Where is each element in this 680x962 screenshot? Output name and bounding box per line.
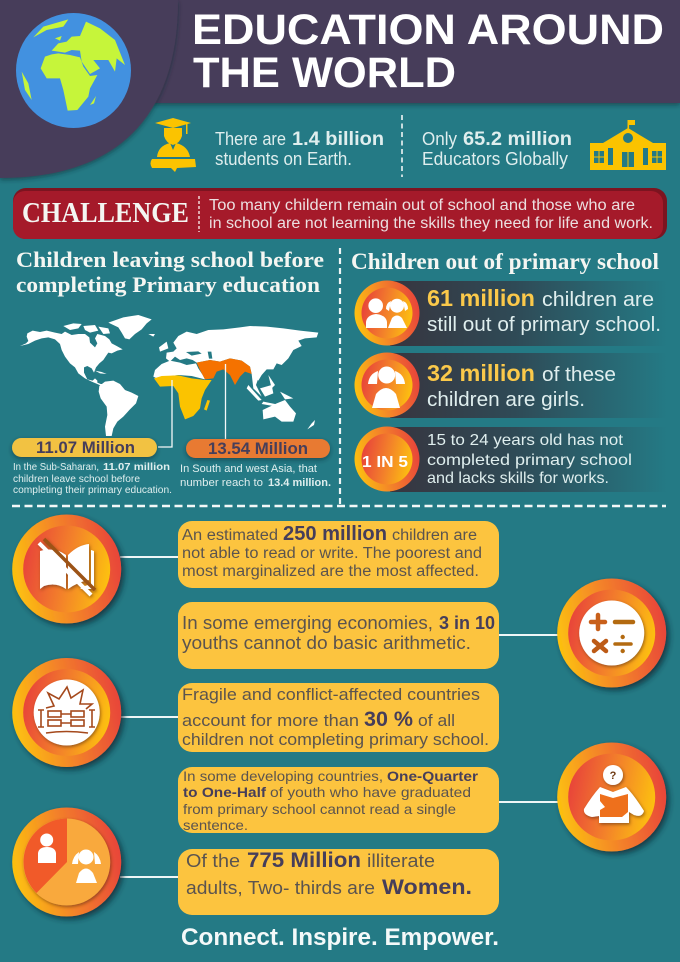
- row: 32 million: 32 million: [427, 360, 535, 386]
- header band: [0, 0, 680, 103]
- box: 775 million: illiterate: [367, 851, 435, 871]
- box: one-quarter to one-half: In some developing countries,: [183, 768, 383, 784]
- row: 61 million: children are: [542, 289, 654, 311]
- icon: conflict fists: [12, 658, 121, 767]
- icon: reader with question: ?: [610, 770, 617, 782]
- icon: graduate: [150, 118, 196, 172]
- title: THE WORLD: [193, 49, 456, 97]
- connector 2: [499, 634, 558, 636]
- world map: [20, 315, 318, 436]
- icon: globe: [16, 13, 131, 128]
- box: 3 in 10: [178, 602, 499, 669]
- box: 30 percent: of all: [418, 711, 455, 730]
- leader line: Africa: [158, 380, 172, 447]
- challenge banner: [13, 188, 667, 239]
- footer tagline: Connect. Inspire. Empower.: [181, 924, 499, 951]
- icon: reader with question: [557, 742, 666, 852]
- box: 250 million: not able to read or write. The poorest and: [182, 545, 482, 562]
- box: one-quarter to one-half: sentence.: [183, 817, 248, 833]
- connector 4: [499, 801, 558, 803]
- left heading: completing Primary education: [16, 272, 320, 297]
- box: one-quarter to one-half: One-Quarter: [387, 768, 479, 784]
- leader line: Asia: [224, 364, 226, 440]
- challenge text: Too many childern remain out of school and those who are: [209, 197, 635, 214]
- row: 61 million: [354, 280, 667, 346]
- stat: students: [215, 129, 384, 169]
- box: one-quarter to one-half: from primary school cannot read a single: [183, 801, 456, 817]
- pill: 13.54 million: 13.54 Million: [208, 439, 308, 458]
- right heading: Children out of primary school: [351, 249, 659, 274]
- box: 3 in 10: youths cannot do basic arithmetic.: [182, 633, 471, 653]
- box: one-quarter to one-half: [178, 767, 499, 833]
- text: South and West Asia: In South and west Asia, that: [180, 463, 317, 475]
- map region: Madagascar: [204, 400, 210, 411]
- pill: 11.07 million: 11.07 Million: [36, 438, 135, 457]
- pill: 11.07 million: [12, 438, 157, 457]
- connector 3: [120, 716, 178, 718]
- box: 775 million: Women.: [382, 876, 472, 899]
- icon: school: [590, 120, 666, 170]
- header quarter circle: [0, 0, 178, 178]
- row: 1 in 5: [354, 426, 667, 492]
- left heading: [16, 247, 324, 297]
- text: sub-Saharan: In the Sub-Saharan,: [13, 462, 99, 473]
- text: sub-Saharan: children leave school before: [13, 474, 140, 485]
- map region: South and West Asia: [197, 358, 252, 385]
- title: [192, 6, 664, 97]
- challenge text: in school are not learning the skills they need for life and work.: [209, 215, 653, 232]
- box: 250 million: 250 million: [283, 523, 387, 545]
- box: 775 million: [178, 849, 499, 915]
- row: 61 million: still out of primary school.: [427, 314, 661, 336]
- box: 775 million: Of the: [186, 851, 240, 871]
- box: 30 percent: children not completing primary school.: [182, 730, 489, 749]
- box: 3 in 10: 3 in 10: [439, 613, 495, 633]
- map region: sub-Saharan Africa: [154, 375, 212, 419]
- box: 250 million: children are: [392, 527, 477, 544]
- row: 1 in 5: 1 IN 5: [362, 454, 408, 471]
- challenge heading: CHALLENGE: [22, 197, 189, 229]
- connector 1: [120, 556, 178, 558]
- title: EDUCATION AROUND: [192, 6, 664, 54]
- text: South and West Asia: [180, 463, 331, 489]
- row: 32 million: [354, 352, 667, 418]
- box: one-quarter to one-half: of youth who have graduated: [270, 784, 471, 800]
- challenge text: [209, 197, 653, 232]
- text: South and West Asia: 13.4 million.: [268, 477, 331, 489]
- box: 30 percent: account for more than: [182, 711, 359, 730]
- stat: students: There are: [215, 129, 286, 149]
- box: 775 million: adults, Two- thirds are: [186, 878, 375, 898]
- box: 250 million: [178, 521, 499, 588]
- row: 1 in 5: and lacks skills for works.: [427, 470, 609, 487]
- connector 5: [120, 876, 178, 878]
- icon: crossed-out book: [12, 514, 121, 624]
- stat: students: students on Earth.: [215, 149, 352, 169]
- box: 775 million: 775 Million: [247, 849, 361, 872]
- row: 1 in 5: completed primary school: [427, 452, 632, 469]
- text: sub-Saharan: [13, 462, 172, 496]
- stat: educators: 65.2 million: [463, 129, 572, 150]
- icon: pie chart with man and woman: [12, 808, 121, 916]
- box: one-quarter to one-half: to One-Half: [183, 784, 266, 800]
- box: 30 percent: [178, 683, 499, 752]
- row: 1 in 5: 15 to 24 years old has not: [427, 432, 624, 449]
- box: 30 percent: Fragile and conflict-affected countries: [182, 685, 480, 704]
- row: 61 million: 61 million: [427, 285, 535, 311]
- row: 32 million: of these: [542, 364, 616, 386]
- box: 3 in 10: In some emerging economies,: [182, 613, 433, 633]
- text: South and West Asia: number reach to: [180, 477, 263, 489]
- row: 32 million: children are girls.: [427, 389, 585, 411]
- stat: educators: Only: [422, 129, 457, 149]
- text: sub-Saharan: 11.07 million: [103, 462, 170, 473]
- text: sub-Saharan: completing their primary education.: [13, 485, 172, 496]
- stat: students: 1.4 billion: [292, 129, 384, 150]
- box: 250 million: most marginalized are the most affected.: [182, 563, 479, 580]
- left heading: Children leaving school before: [16, 247, 324, 272]
- icon: math symbols: [557, 578, 666, 688]
- box: 30 percent: 30 %: [364, 708, 413, 731]
- icon: girl: [368, 366, 405, 408]
- icon: children: [366, 298, 408, 328]
- stat: educators: [422, 129, 572, 169]
- stat: educators: Educators Globally: [422, 149, 568, 169]
- box: 250 million: An estimated: [182, 527, 278, 544]
